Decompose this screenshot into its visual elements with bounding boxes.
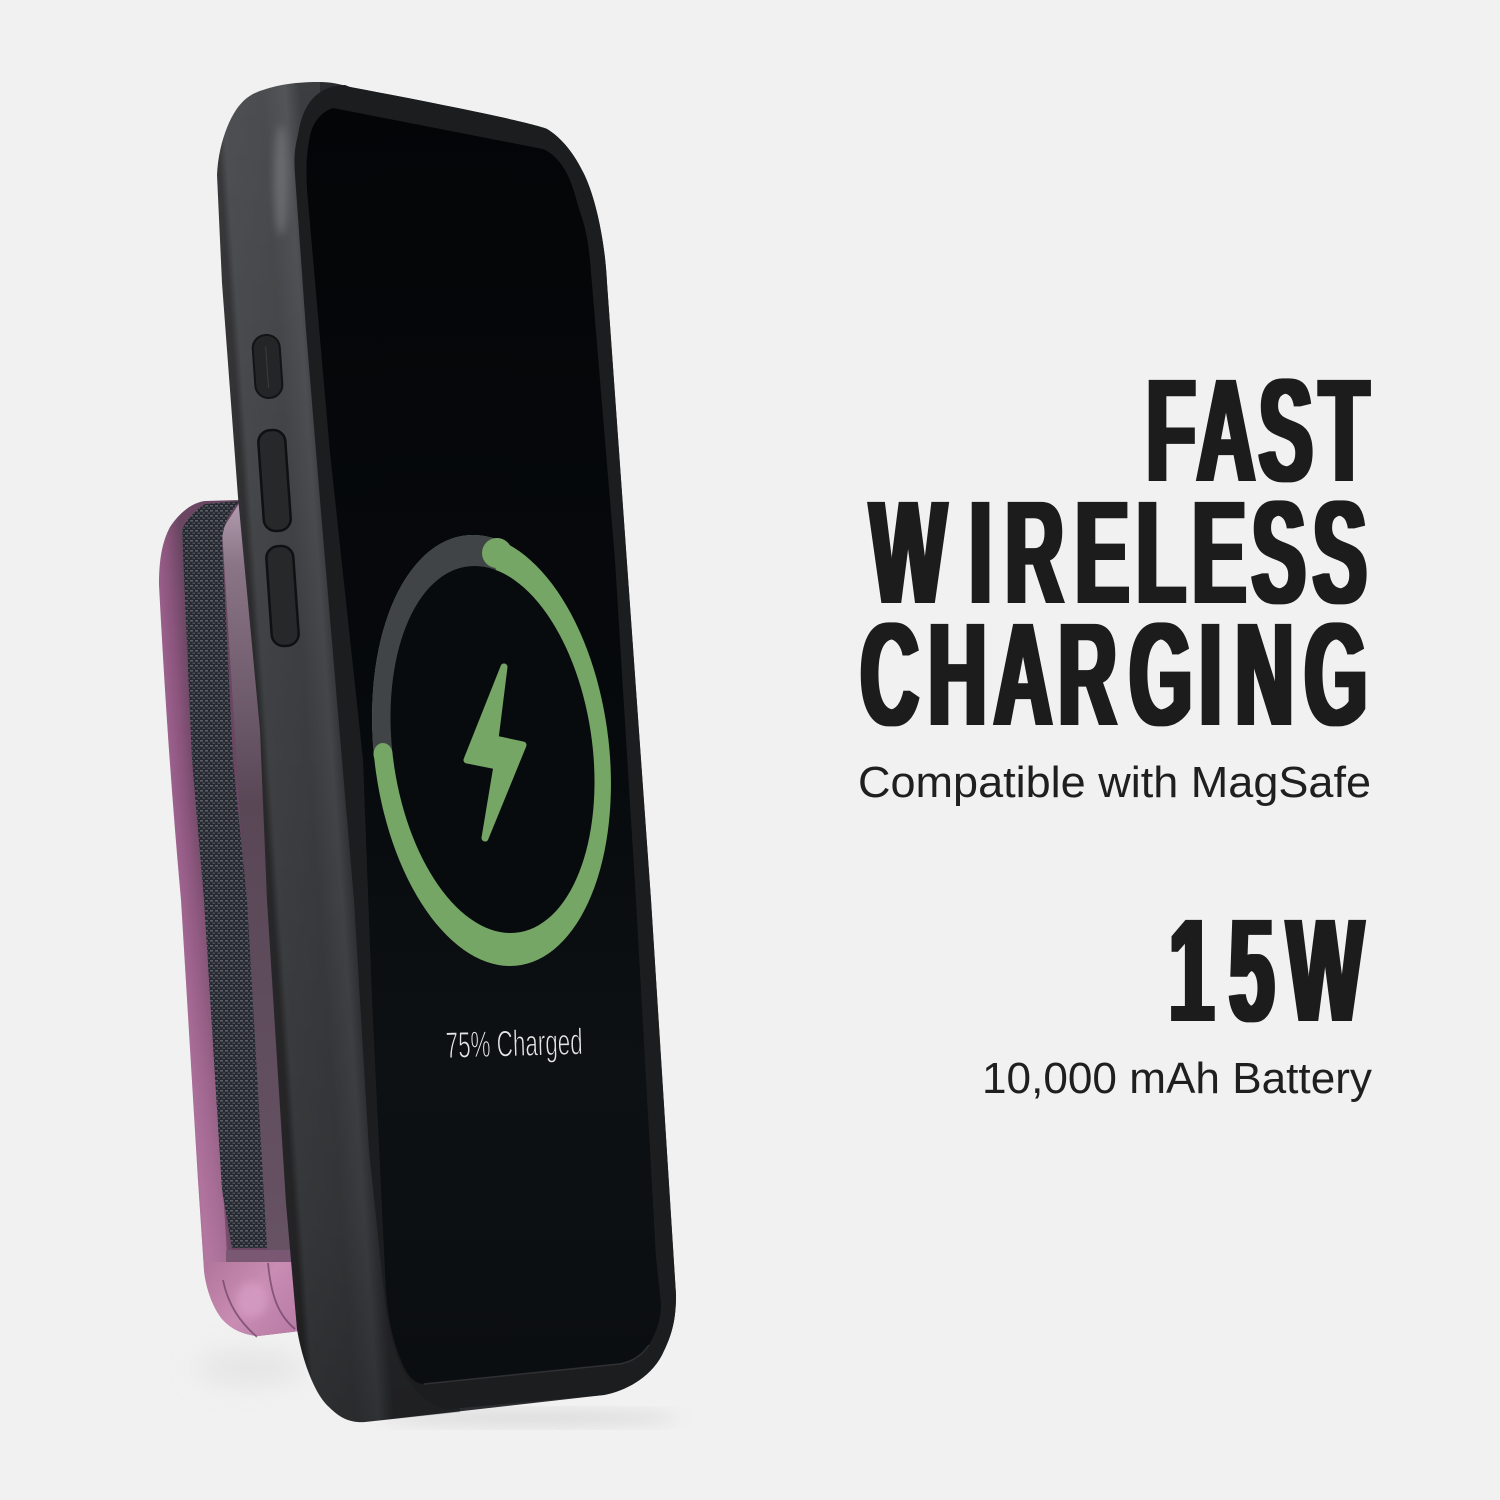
mauve inner band [222, 502, 300, 1262]
phone screen [306, 108, 661, 1384]
heading [860, 350, 1369, 757]
button: volume down [266, 545, 299, 647]
case front lip [294, 85, 676, 1409]
button: volume up [258, 429, 292, 532]
phone in case [217, 82, 676, 1422]
heading line 3: CHARGING [860, 594, 1367, 757]
ground shadows [195, 1354, 680, 1424]
wattage figure: 15W [1169, 890, 1363, 1053]
charging ring [372, 535, 611, 966]
icon: lightning bolt [467, 667, 523, 838]
translucent bottom seams [223, 1263, 295, 1337]
screen bottom rim [424, 1345, 649, 1384]
power bank pink shell [159, 500, 300, 1336]
mauve cross bar [226, 1250, 294, 1262]
pink shell lower tint [172, 800, 228, 1270]
battery capacity: 10,000 mAh Battery [982, 1055, 1372, 1103]
button: power [252, 334, 283, 399]
ring top end cap [482, 538, 512, 568]
fabric mesh panel [182, 501, 267, 1248]
power bank [159, 500, 300, 1337]
green progress ring [355, 535, 628, 966]
ring left end cap [374, 743, 392, 765]
gray remaining track [372, 535, 496, 753]
charge status text: 75% Charged [445, 1021, 583, 1066]
translucent bottom section [204, 1262, 300, 1336]
heading line 1: FAST [1146, 350, 1369, 513]
subheading: Compatible with MagSafe [858, 759, 1371, 807]
ring centre [374, 566, 611, 933]
case outer body [217, 82, 676, 1422]
heading line 2: WIRELESS [870, 472, 1367, 635]
translucent bright spot [236, 1282, 268, 1318]
corner highlight [274, 125, 288, 235]
infographic canvas [159, 82, 1372, 1428]
case body vertical shading [217, 82, 460, 1422]
